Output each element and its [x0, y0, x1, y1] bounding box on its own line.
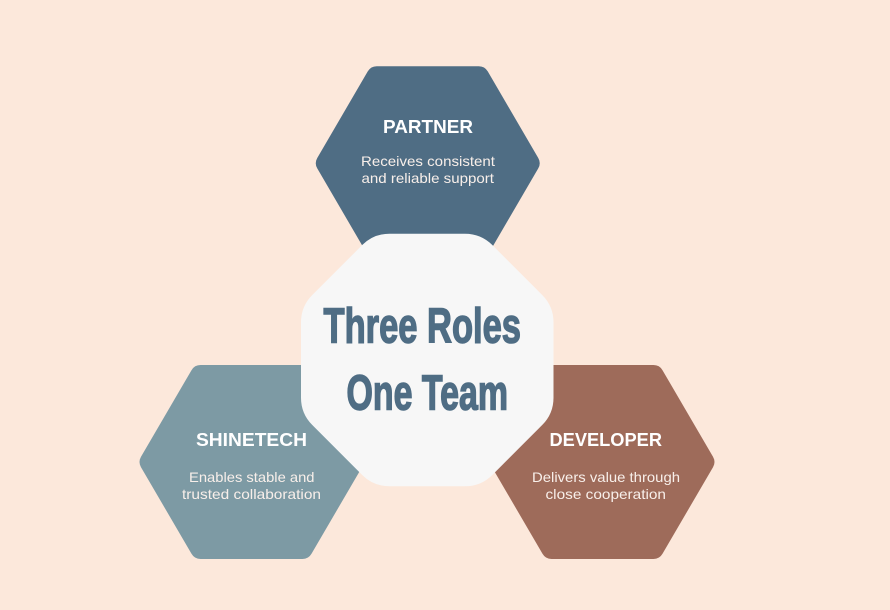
- panel: central octagon with title: [301, 234, 554, 486]
- panel: partner hexagon: Receives consistent: [361, 153, 495, 169]
- panel: central octagon with title: One Team: [346, 366, 508, 420]
- panel: developer hexagon: DEVELOPER: [550, 429, 662, 450]
- panel: developer hexagon: Delivers value through: [532, 469, 680, 485]
- panel: partner hexagon: PARTNER: [383, 116, 473, 137]
- panel: developer hexagon: close cooperation: [546, 486, 666, 502]
- panel: central octagon with title: Three Roles: [324, 300, 521, 354]
- panel: shinetech hexagon: trusted collaboration: [182, 486, 321, 502]
- panel: partner hexagon: and reliable support: [362, 170, 494, 186]
- panel: partner hexagon: [316, 66, 540, 260]
- panel: shinetech hexagon: [140, 365, 364, 559]
- panel: developer hexagon: [490, 365, 714, 559]
- panel: shinetech hexagon: Enables stable and: [189, 469, 314, 485]
- panel: shinetech hexagon: SHINETECH: [196, 429, 307, 450]
